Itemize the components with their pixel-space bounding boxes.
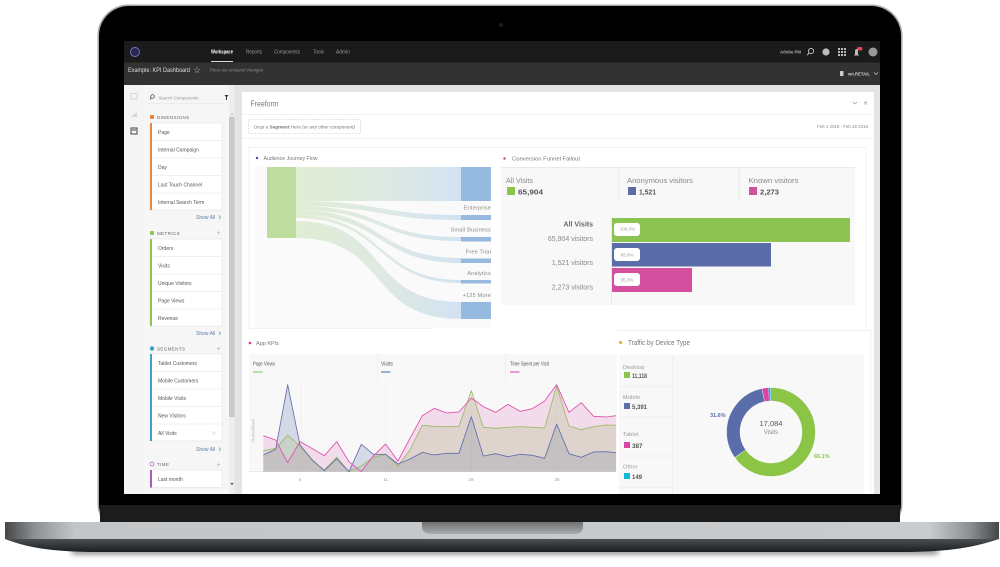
x axis labels: 4 (299, 477, 302, 482)
x axis labels (299, 477, 560, 482)
donut chart: 65.1% (814, 454, 830, 460)
y axis label: Normalized (250, 419, 256, 442)
segments list: Show All (196, 447, 215, 453)
segments list: All Visits (158, 431, 177, 437)
metrics list: Orders (158, 246, 174, 252)
funnel bars (612, 218, 850, 305)
segments list: Ⓐ (212, 430, 216, 436)
dimensions list: Show All (196, 215, 215, 221)
project title bar: wn.RETAIL (847, 72, 870, 78)
area chart series (249, 383, 616, 472)
time list: TIME (157, 462, 169, 467)
device legend: 5,391 (632, 404, 647, 411)
dimensions list (150, 115, 222, 221)
audience journey flow: Audience Journey Flow (264, 156, 318, 162)
funnel summary stats (506, 178, 799, 196)
sankey labels: Small Business (451, 228, 491, 234)
segment drop zone: Drop a Segment Here (or any other component) (254, 124, 355, 130)
left icon rail (124, 85, 144, 494)
dimensions list: Day (158, 165, 167, 171)
project title bar: There are unsaved changes (209, 68, 264, 72)
chart legend (253, 354, 550, 382)
sankey labels: Free Trial (466, 250, 491, 256)
components sidebar (144, 85, 234, 494)
funnel bars: 35.0% (621, 278, 633, 282)
device legend: 149 (632, 474, 642, 481)
search components: Search Components (158, 96, 199, 102)
search components (148, 95, 228, 104)
trackpad notch (422, 522, 583, 534)
device legend: 11,118 (632, 373, 647, 380)
device legend: Desktop (623, 365, 645, 371)
time list (150, 462, 222, 488)
base shadow (72, 549, 938, 554)
chart legend: Page Views (253, 362, 275, 368)
donut chart: 17,084 (760, 419, 782, 428)
date range: Feb 1 2018 - Feb 28 2018 (817, 124, 868, 130)
sankey flows (296, 167, 461, 319)
screen (124, 41, 880, 494)
segments list (150, 346, 222, 453)
sankey nodes (267, 167, 491, 319)
dimensions list: DIMENSIONS (157, 115, 190, 120)
project title bar (124, 62, 880, 85)
app KPIs chart: App KPIs (256, 341, 279, 347)
device legend: Other (623, 464, 638, 470)
funnel row labels (548, 222, 593, 292)
device legend: Tablet (623, 432, 639, 438)
traffic by device type (617, 330, 871, 494)
dimensions list: Internal Campaign (158, 148, 199, 154)
metrics list: Revenue (158, 316, 178, 322)
funnel row labels: 2,273 visitors (552, 284, 593, 292)
top navigation bar: Workspace (211, 50, 233, 56)
metrics list: Unique Visitors (158, 281, 192, 287)
top navigation bar: Adobe PM (780, 50, 801, 54)
top navigation bar (124, 41, 880, 62)
x axis labels: 11 (383, 477, 388, 482)
metrics list (150, 230, 222, 337)
series: visits (263, 385, 616, 472)
workspace panel (242, 92, 874, 494)
traffic by device type: Traffic by Device Type (628, 340, 690, 347)
segments list: New Visitors (158, 414, 186, 420)
chart legend: Time Spent per Visit (510, 362, 550, 368)
top navigation bar: Components (274, 50, 300, 56)
funnel row labels: 1,521 visitors (552, 260, 593, 267)
top navigation bar: Reports (246, 50, 262, 56)
project title bar: ☆ (193, 65, 201, 75)
funnel bars: 65.0% (621, 252, 633, 258)
device legend (619, 355, 672, 494)
metrics list: + (216, 230, 221, 237)
device legend: Mobile (623, 395, 640, 401)
funnel summary stats: 65,904 (518, 188, 544, 196)
donut chart: 31.6% (710, 413, 726, 419)
laptop lid (98, 4, 902, 534)
donut chart (710, 394, 830, 470)
panel controls (853, 102, 867, 104)
conversion funnel fallout: Conversion Funnel Fallout (512, 156, 580, 162)
sankey labels: +125 More (463, 293, 491, 299)
sankey labels: Analytics (467, 271, 491, 277)
chart legend: Visits (381, 362, 393, 368)
metrics list: Page Views (158, 298, 185, 304)
conversion funnel fallout (501, 156, 855, 305)
funnel summary stats: 1,521 (639, 188, 656, 196)
time list: + (216, 462, 221, 469)
funnel summary stats: Known visitors (748, 178, 799, 185)
laptop base (5, 522, 999, 554)
device legend: 387 (632, 443, 643, 450)
audience journey flow (249, 156, 491, 328)
top navigation bar: Tools (313, 50, 324, 56)
dimensions list: Last Touch Channel (158, 182, 202, 188)
app KPIs chart (249, 341, 617, 494)
funnel row labels: All Visits (564, 222, 593, 228)
series: page views (263, 386, 616, 472)
sankey labels (451, 206, 491, 299)
funnel summary stats: 2,273 (760, 188, 779, 196)
funnel bars: 100.0% (620, 226, 635, 232)
segment drop zone (248, 120, 360, 134)
segments list: SEGMENTS (157, 346, 185, 351)
outer panel outline (249, 147, 866, 329)
metrics list: METRICS (157, 231, 180, 236)
panel title: Freeform (250, 100, 279, 108)
top navigation bar: Admin (336, 50, 350, 56)
funnel row labels: 65,904 visitors (548, 236, 593, 243)
donut chart: Visits (764, 430, 778, 436)
metrics list: Visits (158, 264, 170, 270)
x axis labels: 25 (554, 477, 560, 482)
webcam (499, 23, 503, 27)
x axis labels: 18 (468, 477, 474, 482)
funnel summary stats: All Visits (506, 178, 534, 185)
project title bar: Example: KPI Dashboard (128, 67, 190, 74)
dimensions list: Internal Search Term (158, 200, 204, 206)
sankey labels: Enterprise (464, 206, 491, 212)
metrics list: Show All (196, 331, 215, 337)
series: time spent per visit (263, 385, 616, 472)
segments list: Tablet Customers (158, 361, 197, 367)
header icons (807, 47, 878, 56)
segments list: Mobile Visits (158, 396, 186, 402)
dimensions list: Page (158, 130, 170, 136)
funnel summary stats: Anonymous visitors (627, 178, 694, 185)
segments list: + (216, 346, 221, 353)
segments list: Mobile Customers (158, 378, 199, 384)
time list: Last month (158, 477, 183, 483)
